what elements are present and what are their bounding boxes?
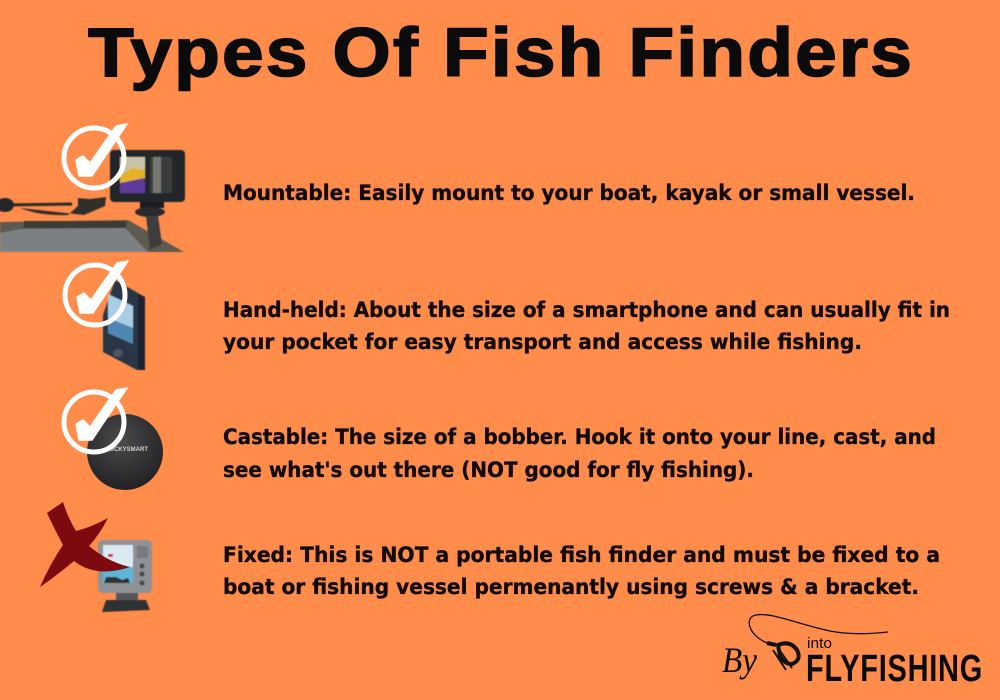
text: fixed: Fixed: This is NOT a portable fish finder and must be fixed to a — [223, 543, 940, 567]
text: hand-held — [223, 298, 950, 354]
title: Types Of Fish Finders — [88, 14, 914, 91]
text: fixed: boat or fishing vessel permenantly using screws & a bracket. — [223, 575, 919, 599]
text: fixed — [223, 543, 940, 599]
logo: into flyfishing — [722, 615, 983, 690]
text: hand-held: Hand-held: About the size of a smartphone and can usually fit in — [223, 298, 950, 322]
text: castable: Castable: The size of a bobber. Hook it onto your line, cast, and — [223, 425, 936, 449]
text: hand-held: your pocket for easy transport and access while fishing. — [223, 330, 862, 354]
icon: castable fish finder — [87, 414, 163, 490]
logo fly — [767, 643, 799, 670]
text: castable — [223, 425, 936, 482]
icon: mountable fish finder — [0, 150, 185, 252]
text: castable: see what's out there (NOT good for fly fishing). — [223, 458, 754, 482]
icon: hand-held fish finder — [103, 280, 145, 370]
icon: check mark hand-held — [65, 261, 128, 325]
icon: check mark castable — [64, 388, 127, 452]
icon: red cross — [40, 502, 130, 587]
text: mountable: Mountable: Easily mount to your boat, kayak or small vessel. — [223, 181, 915, 205]
icon: fixed fish finder — [98, 540, 152, 612]
icon: castable fish finder: LUCKYSMART — [106, 447, 148, 453]
logo line — [749, 615, 888, 643]
icon: check mark mountable — [64, 124, 127, 188]
logo by: By — [722, 640, 757, 680]
logo into: into — [807, 635, 832, 652]
